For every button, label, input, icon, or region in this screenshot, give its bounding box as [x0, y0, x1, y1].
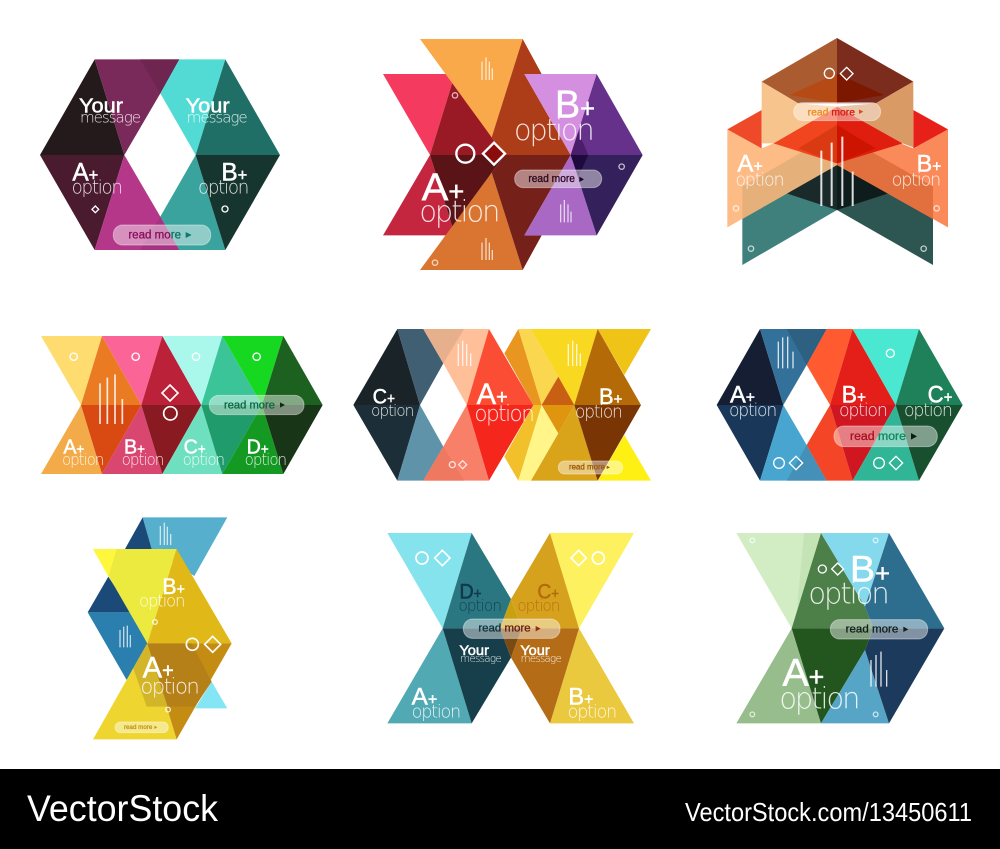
icon: bars [100, 374, 122, 424]
arrow triangles [736, 533, 944, 723]
text option a: option [419, 195, 498, 229]
icon: small circles [153, 620, 170, 712]
text option c: option [183, 450, 224, 469]
text option a: option [735, 170, 783, 191]
button read more [834, 426, 937, 447]
icon: bars [778, 337, 793, 368]
panel: hexagon three options [717, 329, 963, 481]
icon: circle left [416, 552, 428, 564]
text option c: option [517, 596, 559, 615]
heading a+: A+ [63, 435, 84, 458]
text option b: option [514, 113, 593, 147]
icon: circle top [886, 349, 894, 357]
text option a: option [140, 674, 198, 699]
button read more: read more [224, 399, 275, 411]
arrow triangles [383, 39, 643, 270]
heading your right: Your [186, 95, 230, 118]
hexagon triangles [717, 329, 963, 481]
text option a: option [729, 401, 776, 421]
icon: bars top [160, 523, 171, 545]
text option c: option [371, 401, 413, 420]
button read more: read more [478, 623, 531, 635]
icon: small diamond [92, 206, 99, 213]
footer url: VectorStock.com/13450611 [685, 797, 972, 827]
icon: circle [186, 638, 198, 650]
heading a+: A+ [782, 651, 824, 695]
icon: bars [871, 652, 887, 687]
hexagon triangles [40, 59, 280, 250]
heading d+: D+ [459, 579, 482, 603]
footer bar [0, 769, 1000, 849]
button read more: read more [124, 725, 153, 731]
text message left: message [460, 653, 501, 665]
text option b: option [122, 450, 163, 469]
text option a: option [62, 450, 103, 469]
icon: big circle [456, 145, 474, 163]
panel: double arrow a+ b+ [383, 39, 643, 270]
panel: hexagon with yellow overlap [353, 329, 651, 481]
button read more [558, 461, 623, 474]
heading b+: B+ [599, 384, 623, 409]
heading your right: Your [520, 642, 550, 658]
yellow front triangles [93, 549, 232, 739]
text option c: option [904, 401, 952, 421]
button read more: read more [846, 624, 898, 636]
heading c+: C+ [184, 435, 206, 458]
text option b: option [575, 402, 622, 422]
icon: circle right [874, 458, 884, 468]
panel: four option chevron strip [41, 336, 323, 474]
heading a+: A+ [422, 166, 464, 210]
strip triangles [41, 336, 323, 474]
heading b+: B+ [555, 82, 595, 126]
icon: diamond [832, 563, 844, 575]
heading b+: B+ [162, 574, 185, 599]
button read more [794, 103, 881, 121]
icon: small circles [733, 206, 939, 251]
icon: circle [164, 407, 177, 420]
heading a+: A+ [477, 378, 508, 411]
icon: diamond left [435, 550, 450, 566]
heading a+: A+ [737, 151, 763, 178]
heading your left: Your [79, 95, 123, 118]
text option b: option [808, 576, 888, 610]
panel: yellow blue double arrow [88, 517, 232, 739]
heading b+: B+ [124, 435, 145, 458]
heading your left: Your [459, 642, 489, 658]
icon: bars top [482, 57, 492, 80]
x shape triangles [387, 533, 634, 723]
heading b+: B+ [850, 548, 890, 590]
heading a+: A+ [72, 160, 98, 187]
text option b: option [839, 401, 887, 421]
icon: small circle [222, 206, 228, 212]
icon: diamond [205, 636, 221, 652]
button read more: read more [528, 173, 575, 185]
text option d: option [458, 596, 501, 615]
heading b+: B+ [221, 160, 247, 187]
icon: small circles [432, 93, 624, 265]
heading b+: B+ [917, 151, 941, 178]
icon: bars bottom [482, 238, 492, 260]
icon: diamond left [789, 456, 803, 470]
blue back triangles [88, 517, 227, 708]
button read more: read more [569, 463, 606, 472]
heading b+: B+ [568, 683, 593, 710]
heading d+: D+ [247, 435, 269, 458]
icon: bars right [568, 341, 580, 366]
text message right: message [521, 653, 561, 665]
button read more [463, 619, 560, 638]
heading b+: B+ [842, 382, 866, 409]
text option a: option [779, 682, 858, 716]
heading c+: C+ [928, 382, 952, 409]
chevron shapes [727, 38, 948, 265]
icon: small circles [70, 353, 260, 360]
button read more [515, 170, 602, 188]
icon: diamond [840, 67, 853, 80]
icon: diamond right [571, 550, 586, 566]
icon: circle [818, 565, 826, 573]
icon: big diamond [483, 143, 505, 165]
icon: circle [449, 462, 455, 468]
icon: diamond right [889, 456, 903, 470]
icon: circle right [592, 552, 604, 564]
heading c+: C+ [373, 384, 395, 408]
text option b: option [139, 592, 184, 611]
panel: green blue arrow [736, 533, 944, 723]
icon: circle left [774, 458, 784, 468]
text option b: option [892, 170, 940, 191]
button read more [209, 395, 304, 415]
text option a: option [412, 701, 460, 722]
panel: x shape four options [387, 533, 634, 723]
icon: bars left [458, 341, 471, 366]
footer logo: VectorStock [27, 788, 218, 829]
icon: diamond [162, 385, 178, 401]
button read more [113, 225, 211, 245]
icon: bars [821, 137, 853, 206]
hexagon triangles [353, 329, 533, 481]
icon: bars lower [120, 626, 130, 647]
panel: hexagon your message [40, 59, 280, 250]
text option d: option [245, 450, 286, 469]
heading c+: C+ [537, 579, 559, 603]
button read more: read more [128, 227, 181, 241]
heading a+: A+ [412, 683, 437, 710]
text message right: message [187, 109, 247, 127]
button read more: read more [850, 429, 906, 443]
text option a: option [72, 177, 122, 198]
icon: bars right [561, 200, 571, 222]
button read more: read more [808, 107, 855, 118]
icon: circle [824, 68, 834, 78]
text message left: message [80, 109, 141, 127]
heading a+: A+ [730, 382, 755, 409]
button read more [115, 722, 168, 733]
text option b: option [198, 177, 248, 198]
text option a: option [474, 402, 533, 427]
yellow group triangles [504, 329, 651, 481]
panel: stacked chevrons [727, 38, 948, 265]
text option b: option [568, 701, 616, 722]
icon: small circles [750, 538, 878, 717]
icon: diamond [459, 461, 467, 469]
button read more [830, 620, 928, 639]
heading a+: A+ [143, 652, 174, 685]
